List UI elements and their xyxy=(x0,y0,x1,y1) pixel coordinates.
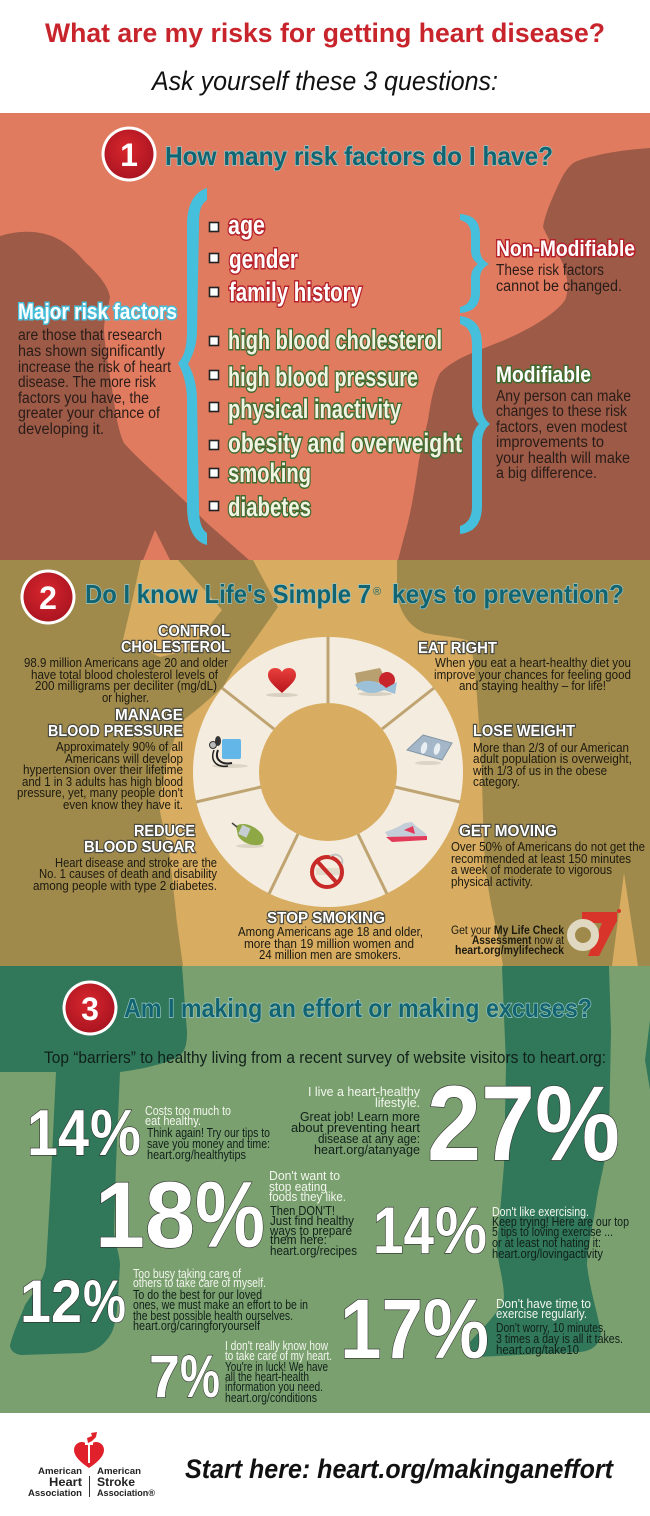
heading: question 2: Do I know Life's Simple 7 xyxy=(85,579,371,609)
badge: number 2: 2 xyxy=(39,580,57,616)
list: modifiable risk factors: high blood cholesterol xyxy=(228,325,442,355)
text block: reduce blood sugar xyxy=(33,823,218,893)
stat: 14% exercising xyxy=(373,1193,629,1267)
text block: manage blood pressure: even know they have it. xyxy=(63,797,183,812)
list: modifiable risk factors: diabetes xyxy=(228,492,311,522)
text block: stop smoking xyxy=(238,910,423,962)
text block: lose weight: LOSE WEIGHT xyxy=(473,723,576,740)
badge: number 1: 1 xyxy=(120,137,138,173)
heading: question 2: ® xyxy=(373,586,381,598)
text block: reduce blood sugar: among people with type 2 diabetes. xyxy=(33,878,217,893)
stat: 12% too busy: 12 xyxy=(20,1268,82,1335)
heading: question 2: keys to prevention? xyxy=(392,579,624,609)
logo: american heart association xyxy=(28,1432,155,1498)
list: non-modifiable risk factors: age xyxy=(228,210,265,240)
stat: 7% don't know how: I don't really know how xyxy=(225,1339,329,1353)
stat: 18% favorite foods: Then DON'T! xyxy=(270,1204,335,1218)
badge: number 2 xyxy=(20,570,76,624)
text block: stop smoking: more than 19 million women and xyxy=(244,936,414,951)
stat: 17% no time: 3 times a day is all it takes. xyxy=(496,1332,623,1346)
brace: non-modifiable xyxy=(460,214,489,313)
text block: non-modifiable: These risk factors xyxy=(496,262,604,279)
stat: 14% exercising: 14 xyxy=(373,1193,434,1267)
panel: question 3 effort or excuses xyxy=(0,966,650,1413)
badge: number 3: 3 xyxy=(81,991,99,1027)
stat: 14% cost xyxy=(27,1096,270,1169)
badge: number 3 xyxy=(62,980,118,1036)
text block: manage blood pressure: Approximately 90% of all xyxy=(56,739,183,754)
text block: my life check: Get your My Life Check xyxy=(451,925,565,937)
stat: 17% no time: Don't worry, 10 minutes, xyxy=(496,1321,606,1335)
stat: 12% too busy: % xyxy=(83,1268,126,1335)
stat: 17% no time: % xyxy=(423,1282,489,1376)
stat: 14% exercising: heart.org/lovingactivity xyxy=(492,1247,604,1261)
stat: 7% don't know how: % xyxy=(180,1343,220,1410)
stat: 12% too busy: others to take care of myself. xyxy=(133,1276,266,1290)
stat: 7% don't know how: information you need. xyxy=(225,1380,323,1394)
stat: 18% favorite foods: % xyxy=(195,1162,265,1267)
text block: manage blood pressure: MANAGE xyxy=(115,707,183,724)
text block: my life check: heart.org/mylifecheck xyxy=(455,945,565,957)
text block: major risk factors: increase the risk of heart xyxy=(18,359,172,376)
list: non-modifiable risk factors: family history xyxy=(229,277,362,307)
text block: eat right: and staying healthy – for life! xyxy=(459,678,606,693)
text block: reduce blood sugar: BLOOD SUGAR xyxy=(84,839,195,856)
text block: manage blood pressure: and 1 in 3 adults has high blood xyxy=(22,774,183,789)
text block: modifiable: a big difference. xyxy=(496,465,597,482)
stat: 7% don't know how xyxy=(149,1339,332,1410)
text block: stop smoking: STOP SMOKING xyxy=(267,910,385,927)
text block: eat right: EAT RIGHT xyxy=(418,640,498,657)
logo: american heart association: Association® xyxy=(97,1488,155,1498)
stat: 27% heart-healthy: Great job! Learn more xyxy=(300,1110,420,1124)
stat: 18% favorite foods: foods they like. xyxy=(269,1190,346,1204)
stat: 12% too busy: heart.org/caringforyourself xyxy=(133,1319,260,1333)
text block: lose weight: adult population is overweight, xyxy=(473,751,632,766)
text block: lose weight: with 1/3 of us in the obese xyxy=(472,763,607,778)
stat: 7% don't know how: to take care of my heart. xyxy=(225,1349,332,1363)
stat: 18% favorite foods: Just find healthy xyxy=(270,1214,355,1228)
panel: question 2 life's simple 7 xyxy=(0,560,650,966)
text block: get moving xyxy=(451,823,645,889)
text block: get moving: recommended at least 150 minutes xyxy=(451,851,631,866)
list: non-modifiable risk factors xyxy=(210,210,362,307)
logo: american heart association: American xyxy=(38,1466,82,1476)
text block: lose weight: category. xyxy=(473,774,520,789)
stat: 14% cost: Think again! Try our tips to xyxy=(147,1126,270,1140)
text block: stop smoking: Among Americans age 18 and older, xyxy=(238,924,423,939)
panel: question 1 risk factors xyxy=(0,113,650,560)
icon: life's simple 7 logo xyxy=(571,909,621,956)
list: modifiable risk factors: obesity and overweight xyxy=(228,428,462,458)
logo: american heart association: American xyxy=(97,1466,141,1476)
text block: lose weight: More than 2/3 of our American xyxy=(473,740,629,755)
text block: my life check xyxy=(451,925,565,957)
stat: 14% cost: save you money and time: xyxy=(147,1137,270,1151)
stat: 14% cost: Costs too much to xyxy=(145,1104,231,1118)
text block: modifiable: changes to these risk xyxy=(496,403,627,420)
stat: 18% favorite foods xyxy=(95,1162,357,1267)
text block: non-modifiable: cannot be changed. xyxy=(496,278,622,295)
text block: control cholesterol: 200 milligrams per deciliter (mg/dL) xyxy=(35,678,217,693)
text block: major risk factors: Major risk factors xyxy=(18,299,177,324)
stat: 14% exercising: Keep trying! Here are our top xyxy=(492,1215,629,1229)
text block: modifiable: factors, even modest xyxy=(496,419,628,436)
logo: american heart association: Heart xyxy=(49,1475,82,1489)
text block: manage blood pressure: pressure, yet, many people don't xyxy=(17,785,183,800)
text block: manage blood pressure: Americans will develop xyxy=(65,751,183,766)
text block: eat right: When you eat a heart-healthy diet you xyxy=(435,655,631,670)
stat: 17% no time xyxy=(340,1282,623,1376)
title: What are my risks for getting heart disease? xyxy=(45,18,605,48)
text block: control cholesterol: or higher. xyxy=(102,690,149,705)
stat: 27% heart-healthy: I live a heart-healthy xyxy=(308,1085,421,1099)
text block: control cholesterol: have total blood cholesterol levels of xyxy=(31,667,218,682)
heading: question 1: How many risk factors do I have? xyxy=(165,141,553,171)
badge: number 1 xyxy=(102,126,156,182)
stat: 18% favorite foods: Don't want to xyxy=(269,1169,340,1183)
text block: modifiable: your health will make xyxy=(496,450,630,467)
text block: manage blood pressure: hypertension over their lifetime xyxy=(23,762,183,777)
list: non-modifiable risk factors: gender xyxy=(229,244,298,274)
text block: reduce blood sugar: REDUCE xyxy=(134,823,195,840)
icon: running shoe xyxy=(385,822,427,842)
icon: no smoking xyxy=(312,855,344,887)
text block: non-modifiable xyxy=(496,236,635,295)
heading: question 2 xyxy=(85,579,624,609)
text block: manage blood pressure xyxy=(17,707,183,812)
text block: major risk factors: disease. The more risk xyxy=(18,374,156,391)
list: modifiable risk factors: physical inactivity xyxy=(228,394,401,424)
logo: american heart association: Association xyxy=(28,1488,82,1498)
text block: major risk factors: has shown significantly xyxy=(18,343,165,360)
stat: 27% heart-healthy: disease at any age: xyxy=(318,1132,420,1146)
subtitle: Ask yourself these 3 questions: xyxy=(150,66,498,96)
brace: main xyxy=(178,188,207,545)
stat: 27% heart-healthy: lifestyle. xyxy=(375,1096,420,1110)
text block: get moving: GET MOVING xyxy=(459,823,557,840)
call to action: Start here: heart.org/makinganeffort xyxy=(185,1454,614,1484)
stat: 18% favorite foods: heart.org/recipes xyxy=(270,1244,357,1258)
intro text: Top “barriers” to healthy living from a recent survey of website visitors to heart.org: xyxy=(44,1048,606,1067)
text block: my life check: Assessment now at xyxy=(472,935,565,947)
stat: 7% don't know how: heart.org/conditions xyxy=(225,1391,317,1405)
footer xyxy=(28,1432,614,1498)
stat: 18% favorite foods: them here: xyxy=(270,1233,327,1247)
brace: modifiable xyxy=(460,316,490,534)
text block: major risk factors: greater your chance of xyxy=(18,405,161,422)
text block: modifiable xyxy=(496,362,631,482)
stat: 17% no time: 17 xyxy=(340,1282,423,1376)
list: modifiable risk factors: smoking xyxy=(228,458,311,488)
stat: 7% don't know how: You're in luck! We have xyxy=(225,1360,328,1374)
stat: 7% don't know how: 7 xyxy=(149,1343,180,1410)
stat: 12% too busy: Too busy taking care of xyxy=(133,1267,241,1281)
stat: 17% no time: heart.org/take10 xyxy=(496,1343,579,1357)
stat: 18% favorite foods: ways to prepare xyxy=(269,1224,352,1238)
text block: modifiable: Any person can make xyxy=(496,388,631,405)
text block: reduce blood sugar: Heart disease and stroke are the xyxy=(55,855,217,870)
text block: major risk factors: developing it. xyxy=(18,421,104,438)
icon: glucose meter xyxy=(232,823,264,848)
stat: 27% heart-healthy: heart.org/atanyage xyxy=(314,1143,420,1157)
logo: american heart association: Stroke xyxy=(97,1475,135,1489)
stat: 14% cost: heart.org/healthytips xyxy=(147,1148,246,1162)
text block: major risk factors: factors you have, the xyxy=(18,390,149,407)
stat: 27% heart-healthy xyxy=(291,1063,620,1183)
stat: 14% cost: % xyxy=(90,1096,141,1169)
text block: reduce blood sugar: No. 1 causes of death and disability xyxy=(39,866,218,881)
stat: 12% too busy xyxy=(20,1267,308,1335)
text block: major risk factors xyxy=(18,299,177,438)
stat: 27% heart-healthy: about preventing heart xyxy=(291,1121,421,1135)
text block: get moving: physical activity. xyxy=(451,874,533,889)
icon: heart xyxy=(266,668,298,697)
chart: seven segment wheel xyxy=(193,637,463,907)
stat: 12% too busy: the best possible health ourselves. xyxy=(133,1309,293,1323)
stat: 14% cost: 14 xyxy=(27,1096,89,1169)
text block: major risk factors: are those that research xyxy=(18,327,162,344)
text block: control cholesterol xyxy=(24,623,230,705)
list: modifiable risk factors xyxy=(210,325,462,522)
stat: 14% exercising: 5 tips to loving exercise ... xyxy=(492,1225,613,1239)
text block: control cholesterol: CONTROL xyxy=(158,623,230,640)
text block: control cholesterol: CHOLESTEROL xyxy=(121,639,230,656)
text block: modifiable: improvements to xyxy=(496,434,604,451)
text block: eat right xyxy=(418,640,631,693)
stat: 14% exercising: Don't like exercising. xyxy=(492,1205,589,1219)
text block: get moving: a week of moderate to vigorous xyxy=(451,862,612,877)
stat: 14% exercising: % xyxy=(435,1193,487,1267)
icon: healthy food xyxy=(355,668,397,696)
text block: lose weight xyxy=(472,723,632,789)
text block: stop smoking: 24 million men are smokers. xyxy=(259,947,401,962)
text block: eat right: improve your chances for feeling good xyxy=(434,667,631,682)
text block: manage blood pressure: BLOOD PRESSURE xyxy=(48,723,183,740)
stat: 14% cost: eat healthy. xyxy=(145,1114,201,1128)
text block: modifiable: Modifiable xyxy=(496,362,591,387)
stat: 27% heart-healthy: 27 xyxy=(427,1063,535,1183)
stat: 18% favorite foods: stop eating xyxy=(269,1180,327,1194)
stat: 12% too busy: To do the best for our loved xyxy=(133,1288,262,1302)
list: modifiable risk factors: high blood pressure xyxy=(228,362,418,392)
stat: 12% too busy: ones, we must make an effort to be in xyxy=(133,1298,308,1312)
stat: 14% exercising: or at least not hating it: xyxy=(492,1236,601,1250)
icon: blood pressure cuff xyxy=(210,736,248,768)
header xyxy=(45,18,605,96)
stat: 7% don't know how: all the heart-health xyxy=(225,1370,309,1384)
stat: 18% favorite foods: 18 xyxy=(95,1162,195,1267)
text block: control cholesterol: 98.9 million Americans age 20 and older xyxy=(24,655,229,670)
stat: 17% no time: Don't have time to xyxy=(496,1297,591,1311)
heading: question 3: Am I making an effort or making excuses? xyxy=(124,993,592,1023)
stat: 27% heart-healthy: % xyxy=(535,1063,620,1183)
stat: 17% no time: exercise regularly. xyxy=(496,1307,587,1321)
icon: scale xyxy=(407,735,452,765)
